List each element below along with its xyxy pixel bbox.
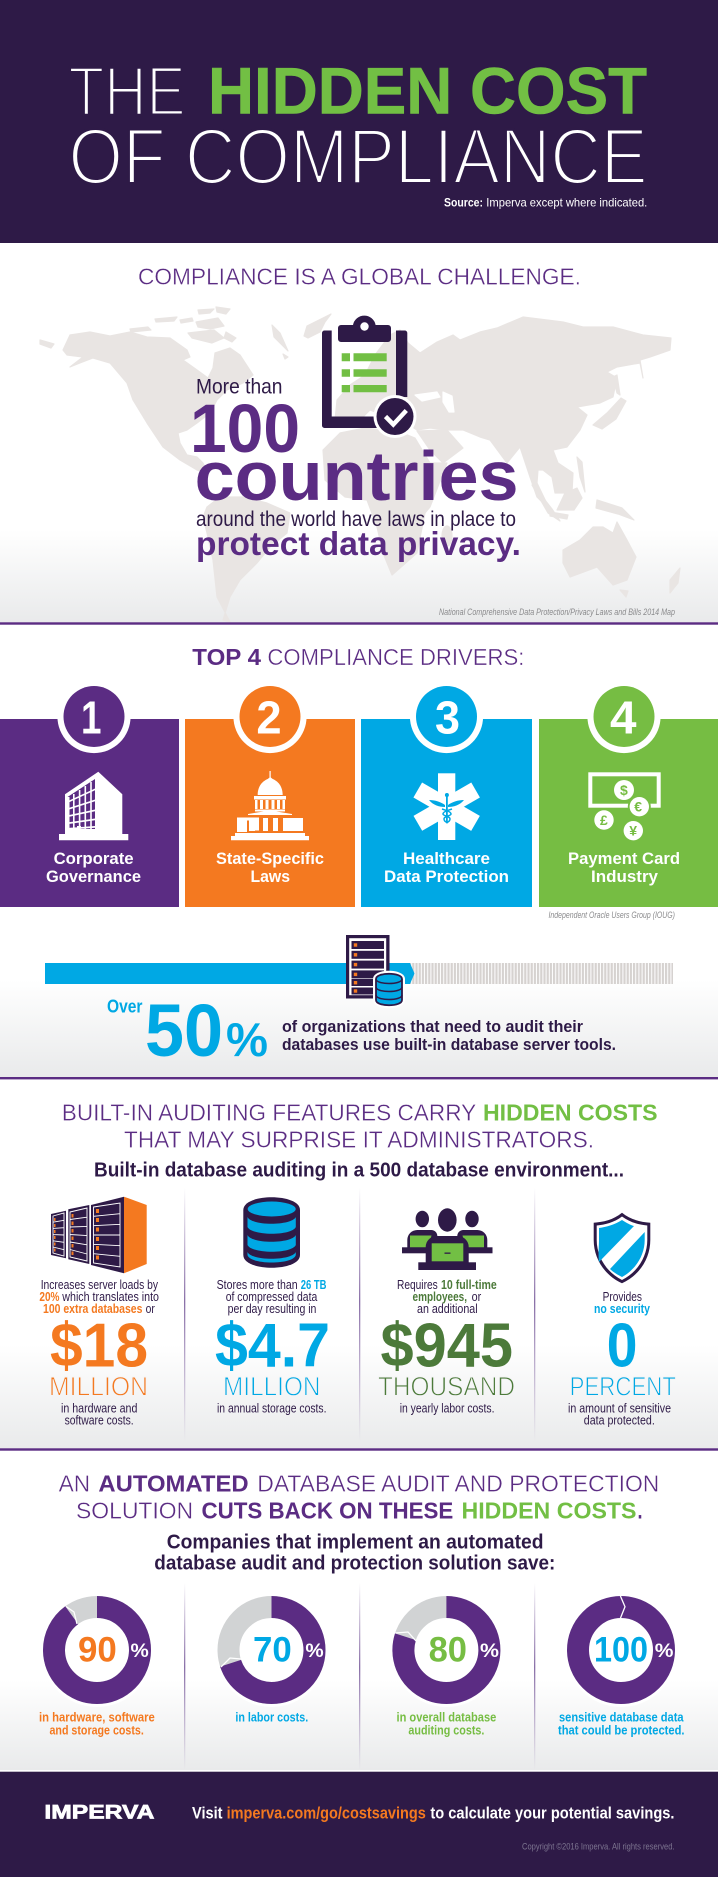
icon: banknote and currency coins: £ [600, 812, 608, 828]
description: or [146, 1302, 155, 1316]
panel: global challenge [0, 243, 718, 623]
description: of compressed data [226, 1290, 317, 1304]
label [384, 850, 509, 886]
statistic: more than 100 countries: 100 [190, 390, 300, 467]
icon: server rack and database [346, 935, 405, 1008]
text: built-in tools: databases use built-in database server tools. [282, 1036, 616, 1054]
driver 1: corporate governance: 1 [81, 691, 102, 743]
heading: top 4 compliance drivers: COMPLIANCE DRIVERS: [267, 644, 524, 670]
statistic: over 50% [107, 989, 268, 1072]
description: 20% [39, 1290, 60, 1304]
statistic: over 50%: Over [107, 997, 142, 1017]
statistic: more than 100 countries: protect data privacy. [196, 525, 521, 562]
description: an additional [417, 1302, 478, 1316]
icon: banknote and currency coins: € [634, 799, 642, 815]
panel: over 50 percent statistic [0, 935, 718, 1078]
figure: 0 percent: 0 [607, 1312, 637, 1381]
label: State-Specific [216, 850, 324, 868]
title [68, 52, 648, 200]
icon: database [243, 1197, 300, 1268]
statistic: over 50%: 50 [145, 989, 223, 1072]
label [46, 850, 141, 886]
source note: Imperva except where indicated. [486, 196, 647, 210]
statistic: over 50%: % [226, 1013, 268, 1066]
donut: 70 percent [216, 1595, 328, 1707]
figure: 0 percent: PERCENT [570, 1372, 676, 1402]
description: per day resulting in [228, 1302, 316, 1316]
icon: banknote and currency coins [590, 774, 659, 840]
icon: banknote and currency coins: ¥ [629, 823, 637, 839]
driver 2: state-specific laws: 2 [256, 691, 282, 743]
figure: $4.7 million: MILLION [223, 1372, 320, 1402]
donut: 90 percent [41, 1595, 153, 1707]
description: 100 extra databases [43, 1302, 142, 1316]
caption: data protected. [584, 1413, 655, 1427]
column: labor cost [378, 1208, 515, 1415]
label: Laws [250, 868, 290, 886]
icon: employees at laptops [402, 1208, 492, 1270]
description: employees, [412, 1290, 467, 1304]
call to action: Visit [192, 1804, 223, 1822]
call to action [192, 1804, 674, 1822]
description: or [472, 1290, 481, 1304]
description [397, 1278, 497, 1316]
caption: in yearly labor costs. [400, 1401, 494, 1415]
caption: software costs. [65, 1413, 134, 1427]
figure: $945 thousand: THOUSAND [378, 1372, 515, 1402]
caption [61, 1401, 137, 1427]
description: 10 full-time [441, 1278, 497, 1292]
caption: auditing savings: in overall database [396, 1710, 496, 1725]
icon: office building [59, 772, 128, 840]
description: Increases server loads by [41, 1278, 159, 1292]
label: Data Protection [384, 868, 509, 886]
logo: Imperva: IMPERVA [44, 1802, 155, 1823]
driver 4: payment card industry [539, 680, 718, 907]
label: Corporate [54, 850, 134, 868]
caption: protected data: sensitive database data [559, 1710, 684, 1725]
heading: automated solution: . [638, 1497, 642, 1523]
donut: 80 percent: % [480, 1641, 499, 1662]
heading: automated solution: DATABASE AUDIT AND PROTECTION [257, 1471, 659, 1497]
driver 3: healthcare data protection: 3 [435, 691, 460, 743]
panel: header [0, 0, 718, 243]
caption: labor savings: in labor costs. [235, 1710, 308, 1725]
driver 2: state-specific laws [185, 680, 355, 907]
caption: in annual storage costs. [217, 1401, 326, 1415]
figure: 0 percent [570, 1312, 676, 1402]
description: which translates into [61, 1290, 159, 1304]
text: built-in tools [282, 1018, 616, 1054]
progress bar arrow [45, 963, 673, 984]
driver 3: healthcare data protection [361, 680, 532, 907]
title: HIDDEN COST [208, 54, 647, 128]
caption: in amount of sensitive [568, 1401, 671, 1415]
heading: built-in auditing features: BUILT-IN AUDITING FEATURES CARRY [62, 1100, 477, 1126]
caption: hardware savings: and storage costs. [50, 1723, 144, 1738]
heading: automated solution: AN [59, 1471, 90, 1497]
heading: automated solution [59, 1471, 659, 1523]
icon: clipboard with check [322, 316, 416, 438]
donut: 80 percent [390, 1595, 502, 1707]
description [217, 1278, 326, 1316]
donut: 100 percent: % [655, 1641, 674, 1662]
title: THE [68, 52, 186, 130]
heading: automated solution: SOLUTION [76, 1497, 193, 1523]
call to action: to calculate your potential savings. [430, 1804, 674, 1822]
icon: banknote and currency coins: $ [620, 782, 628, 798]
caption: in hardware and [61, 1401, 137, 1415]
heading: automated solution: AUTOMATED [98, 1471, 249, 1497]
caption: hardware savings: in hardware, software [39, 1710, 155, 1725]
label [216, 850, 324, 886]
panel: footer [0, 1772, 718, 1877]
description: Provides [603, 1290, 642, 1304]
heading: automated solution: HIDDEN COSTS [462, 1497, 636, 1523]
heading: built-in auditing features: HIDDEN COSTS [483, 1100, 658, 1126]
donut: 100 percent [565, 1595, 677, 1707]
description: Requires [397, 1278, 438, 1292]
call to action: imperva.com/go/costsavings [227, 1804, 426, 1822]
source note: Source: [444, 196, 483, 210]
donut: 70 percent: % [305, 1641, 324, 1662]
icon: capitol building [231, 771, 309, 840]
panel: top 4 compliance drivers [0, 625, 718, 980]
label [568, 850, 680, 886]
icon: shield [594, 1213, 650, 1283]
label: Governance [46, 868, 141, 886]
column: server cost [39, 1197, 159, 1427]
figure: $4.7 million: $4.7 [215, 1312, 330, 1381]
icon: star of life [413, 773, 480, 840]
description: no security [594, 1302, 650, 1316]
label: Healthcare [403, 850, 490, 868]
icon: server racks [51, 1197, 147, 1273]
figure: $18 million: $18 [50, 1312, 148, 1381]
subheading: 500 database environment: Built-in database auditing in a 500 database environment... [94, 1160, 624, 1182]
caption: protected data: that could be protected. [558, 1723, 684, 1738]
title: OF COMPLIANCE [68, 112, 648, 200]
panel: automated solution savings [0, 1471, 718, 1770]
text: built-in tools: of organizations that need to audit their [282, 1018, 584, 1036]
description [594, 1290, 650, 1316]
label: Payment Card [568, 850, 680, 868]
caption: auditing savings [396, 1710, 496, 1738]
statistic: more than 100 countries: More than [196, 375, 282, 399]
caption [568, 1401, 671, 1427]
label: Industry [591, 868, 659, 886]
statistic: more than 100 countries [190, 375, 521, 562]
heading: built-in auditing features: THAT MAY SURPRISE IT ADMINISTRATORS. [124, 1127, 594, 1153]
description: Stores more than [217, 1278, 298, 1292]
caption: protected data [558, 1710, 684, 1738]
driver 1: corporate governance [0, 680, 179, 907]
citation: IOUG: Independent Oracle Users Group (IOUG) [548, 910, 675, 921]
caption: auditing savings: auditing costs. [408, 1723, 484, 1738]
subheading: companies save: database audit and protection solution save: [154, 1552, 555, 1574]
donut: 70 percent: 70 [253, 1631, 292, 1670]
caption: hardware savings [39, 1710, 155, 1738]
heading: compliance is a global challenge: COMPLIANCE IS A GLOBAL CHALLENGE. [138, 264, 581, 290]
description: 26 TB [301, 1278, 326, 1292]
donut: 90 percent: 90 [78, 1631, 117, 1670]
column: storage cost [215, 1197, 330, 1415]
column: no security [568, 1213, 676, 1427]
driver 4: payment card industry: 4 [610, 691, 637, 743]
heading: top 4 compliance drivers: TOP 4 [192, 644, 261, 670]
statistic: more than 100 countries: countries [195, 437, 519, 515]
donut: 80 percent: 80 [429, 1631, 467, 1670]
copyright: Copyright ©2016 Imperva. All rights reserved. [522, 1841, 674, 1852]
subheading: companies save: Companies that implement an automated [167, 1532, 543, 1554]
description [39, 1278, 159, 1316]
figure: $945 thousand: $945 [380, 1312, 513, 1381]
statistic: more than 100 countries: around the world have laws in place to [196, 508, 516, 531]
world map [40, 307, 680, 622]
figure: $18 million: MILLION [49, 1372, 148, 1402]
heading: built-in auditing features [62, 1100, 658, 1153]
subheading: companies save [154, 1532, 555, 1574]
heading: automated solution: CUTS BACK ON THESE [202, 1497, 453, 1523]
donut: 90 percent: % [130, 1641, 149, 1662]
panel: hidden costs [0, 1100, 718, 1449]
donut: 100 percent: 100 [594, 1631, 648, 1670]
